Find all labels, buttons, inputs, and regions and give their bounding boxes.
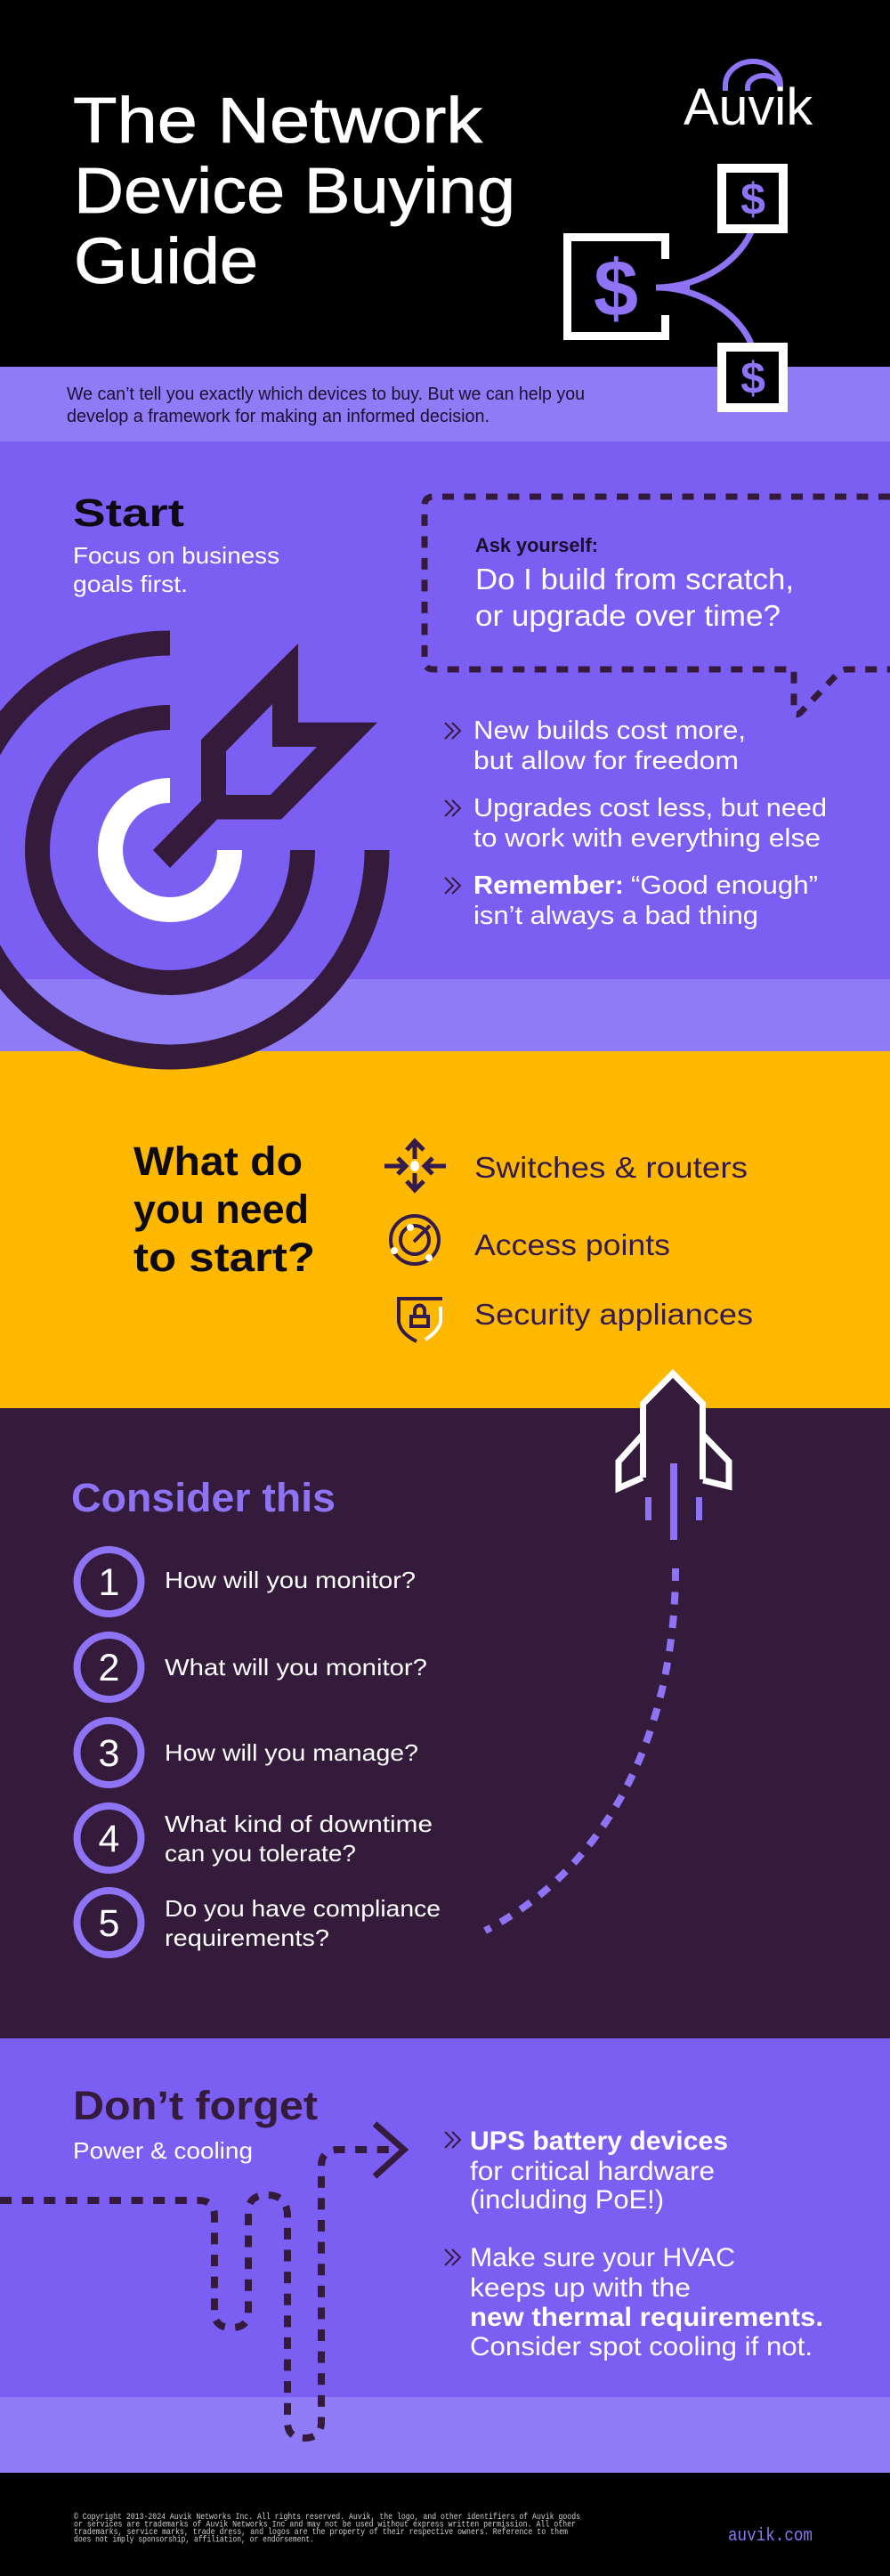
dashed winding arrow [0,2124,404,2438]
panel: don't forget [0,2038,890,2473]
bullet: upgrades [445,794,827,853]
item 3: 3 [99,1732,119,1775]
heading: what do you need: to start? [134,1235,315,1280]
intro text: We can’t tell you exactly which devices to buy. But we can help you [67,385,585,404]
icon: branching dollar boxes [568,168,783,408]
speech bubble: ask yourself: Do I build from scratch, [475,563,794,595]
bullet: ups battery devices [445,2126,728,2215]
copyright notice: or services are trademarks of Auvik Networks Inc and may not be used without express written permission. All other [74,2519,576,2530]
copyright notice: trademarks, service marks, trade dress, and logos are the property of their respective owners. Reference to them [74,2527,568,2538]
item 4: 4 [99,1818,119,1860]
bullet: remember [445,871,818,930]
bullet: upgrades: to work with everything else [473,824,821,853]
title: Device Buying [74,156,515,227]
panel: start [0,441,890,1057]
dashed flight path [485,1568,676,1931]
intro text [67,385,585,426]
item 4: can you tolerate? [165,1840,356,1867]
bullet: new builds: but allow for freedom [473,747,739,775]
item 5: 5 [99,1902,119,1945]
speech bubble: ask yourself: or upgrade over time? [475,599,781,632]
heading: what do you need [134,1138,315,1280]
icon: branching dollar boxes: $ [740,174,765,224]
speech bubble: ask yourself: Ask yourself: [475,534,598,556]
bullet: ups battery devices: (including PoE!) [470,2185,664,2215]
bullet: remember: isn’t always a bad thing [473,902,758,930]
logo: Auvik: Auvik [684,78,813,136]
heading: what do you need: you need [134,1187,309,1232]
title: The Network [73,85,483,157]
bullet: hvac: Make sure your HVAC [470,2243,735,2272]
icon: branching dollar boxes: $ [594,245,638,334]
copyright notice: does not imply sponsorship, affiliation, or endorsement. [74,2535,314,2546]
speech bubble: ask yourself [425,497,890,715]
copyright notice [74,2512,580,2546]
copyright notice: © Copyright 2013-2024 Auvik Networks Inc. All rights reserved. Auvik, the logo, and other identifiers of Auvik goods [74,2512,580,2523]
subheading: power and cooling: Power & cooling [73,2137,253,2164]
icon: rocket [619,1373,729,1540]
heading: don't forget: Don’t forget [73,2083,318,2128]
panel: what do you need to start [0,1051,890,1408]
panel: header [0,0,890,441]
item 1: How will you monitor? [165,1567,416,1593]
item 2: 2 [99,1647,119,1689]
bullet: ups battery devices: for critical hardware [470,2157,715,2186]
panel: consider this [0,1373,890,2038]
bullet: hvac [445,2243,823,2361]
intro text: develop a framework for making an informed decision. [67,407,490,426]
item 3: How will you manage? [165,1739,418,1766]
bullet: remember: “Good enough” [631,871,818,900]
label: security appliances: Security appliances [474,1298,753,1331]
item 3 [77,1721,418,1785]
icon: target with arrow [0,643,377,1057]
bullet: new builds: New builds cost more, [473,717,746,745]
bullet: new builds [445,717,746,775]
bullet: hvac: keeps up with the [470,2273,691,2303]
bullet: remember: Remember: [473,871,624,900]
item 2: What will you monitor? [165,1654,427,1681]
subheading: business goals: goals first. [73,571,188,597]
item 5: requirements? [165,1924,329,1951]
label: access points: Access points [474,1228,670,1261]
item 5 [77,1891,441,1955]
subheading: business goals: Focus on business [73,542,279,569]
bullet: hvac: Consider spot cooling if not. [470,2332,813,2361]
subheading: business goals [73,542,279,597]
title [73,85,515,297]
icon: security shield [397,1299,442,1341]
heading: start: Start [73,491,184,535]
item 1 [77,1550,416,1614]
label: switches and routers: Switches & routers [474,1151,748,1184]
heading: consider this: Consider this [71,1475,336,1520]
title: Guide [74,226,258,297]
icon: branching dollar boxes: $ [740,353,765,403]
bullet: ups battery devices: UPS battery devices [470,2126,728,2156]
panel: footer [0,2473,890,2576]
item 2 [77,1635,427,1699]
icon: switches and routers [384,1141,446,1190]
item 5: Do you have compliance [165,1895,441,1922]
item 4: What kind of downtime [165,1810,433,1837]
bullet: hvac: new thermal requirements. [470,2303,823,2332]
icon: access points [391,1216,439,1264]
item 1: 1 [99,1561,119,1604]
website: auvik.com [728,2526,813,2547]
item 4 [77,1806,433,1870]
heading: what do you need: What do [134,1138,303,1184]
bullet: upgrades: Upgrades cost less, but need [473,794,827,822]
